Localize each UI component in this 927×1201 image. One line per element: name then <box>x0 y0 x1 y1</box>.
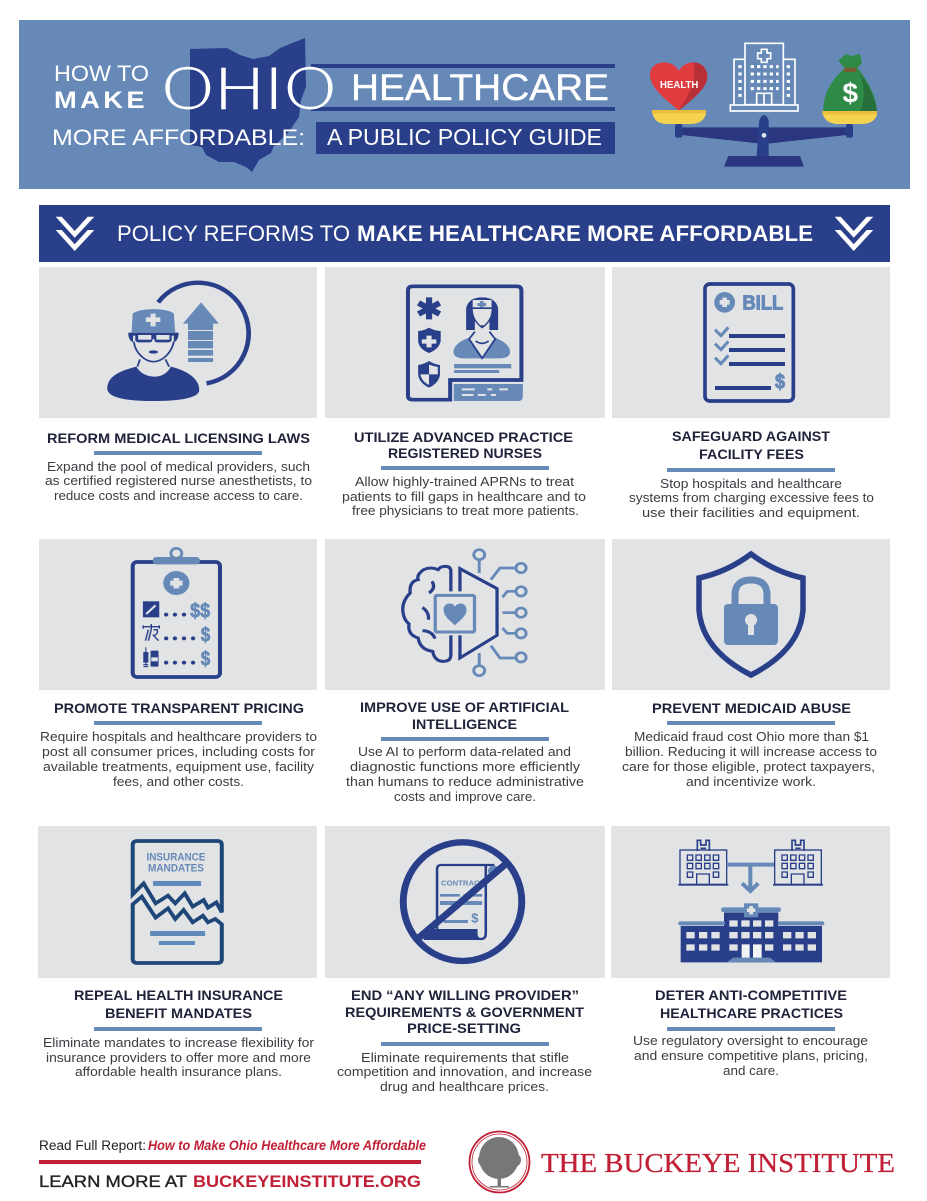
heading <box>345 987 584 1036</box>
title: MAKE <box>54 87 148 114</box>
heading <box>655 987 847 1021</box>
title: A PUBLIC POLICY GUIDE <box>327 124 602 150</box>
icon: torn insurance mandates document: MANDATES <box>148 861 204 875</box>
icon: left small hospital <box>678 840 728 886</box>
read full report line: Read Full Report: <box>39 1138 146 1153</box>
heading: IMPROVE USE OF ARTIFICIAL <box>360 699 569 715</box>
icon: torn insurance mandates document: INSURANCE <box>147 850 206 864</box>
heading <box>74 987 283 1021</box>
description: Stop hospitals and healthcare <box>660 476 842 491</box>
heading <box>360 699 569 732</box>
icon: contract with prohibition sign <box>403 842 522 961</box>
accent bar <box>381 1042 549 1046</box>
icon: contract with prohibition sign: $ <box>471 910 479 925</box>
accent bar <box>94 451 262 455</box>
heading: PREVENT MEDICAID ABUSE <box>652 700 851 716</box>
heading: FACILITY FEES <box>699 446 804 462</box>
heading: REPEAL HEALTH INSURANCE <box>74 987 283 1003</box>
description: Require hospitals and healthcare providers to <box>40 729 317 744</box>
heading: REQUIREMENTS & GOVERNMENT <box>345 1004 584 1020</box>
accent bar <box>381 466 549 470</box>
accent bar <box>667 468 835 472</box>
description: patients to fill gaps in healthcare and to <box>342 489 586 504</box>
title <box>52 54 615 154</box>
accent bar <box>667 721 835 725</box>
accent bar <box>94 721 262 725</box>
heading: DETER ANTI-COMPETITIVE <box>655 987 847 1003</box>
heading: REGISTERED NURSES <box>388 445 542 461</box>
read full report line: How to Make Ohio Healthcare More Affordable <box>148 1138 426 1153</box>
icon: provider with upward arrow <box>107 283 249 401</box>
icon: medical bill <box>705 284 793 401</box>
description: and care. <box>723 1063 779 1078</box>
icon: scale balancing health, hospital and money: $ <box>843 78 859 109</box>
heading <box>354 429 573 461</box>
description <box>346 744 584 804</box>
icon: money bag <box>823 67 877 112</box>
icon: shield with padlock <box>699 554 803 675</box>
description: reduce costs and increase access to care. <box>54 488 303 503</box>
title: HOW TO <box>54 61 149 86</box>
icon: torn insurance mandates document <box>133 841 222 963</box>
panel: safeguard against facility fees <box>612 267 890 520</box>
description: insurance providers to offer more and more <box>46 1050 311 1065</box>
description: care for those eligible, protect taxpayers, <box>622 759 875 774</box>
icon: balance beam <box>652 110 706 124</box>
footer: report link and website <box>39 1138 426 1191</box>
description <box>342 474 586 518</box>
description: fees, and other costs. <box>113 774 244 789</box>
heading text <box>117 221 813 246</box>
description: affordable health insurance plans. <box>75 1064 282 1079</box>
description: Use regulatory oversight to encourage <box>633 1033 868 1048</box>
description <box>40 729 317 789</box>
description: and ensure competitive plans, pricing, <box>634 1048 868 1063</box>
icon: scale balancing health, hospital and money: HEALTH <box>660 80 698 91</box>
description <box>622 729 877 789</box>
panel: prevent medicaid abuse <box>612 539 890 789</box>
description: as certified registered nurse anesthetists, to <box>45 473 312 488</box>
description: Allow highly-trained APRNs to treat <box>355 474 574 489</box>
accent bar <box>667 1027 835 1031</box>
icon: medical bill: BILL <box>742 292 783 315</box>
panel: promote transparent pricing <box>39 539 317 789</box>
section heading banner <box>39 205 890 262</box>
title: MORE AFFORDABLE: <box>52 125 305 150</box>
description: diagnostic functions more efficiently <box>350 759 581 774</box>
description: costs and improve care. <box>394 789 536 804</box>
panel: end any willing provider requirements <box>325 826 605 1094</box>
description: than humans to reduce administrative <box>346 774 584 789</box>
description: systems from charging excessive fees to <box>629 490 874 505</box>
icon: AI brain circuit with heart <box>403 550 526 676</box>
accent bar <box>94 1027 262 1031</box>
icon: heart <box>650 62 707 111</box>
panel: reform medical licensing laws <box>39 267 317 503</box>
icon: large hospital <box>678 903 824 962</box>
heading: INTELLIGENCE <box>412 716 517 732</box>
learn more line <box>39 1172 421 1191</box>
icon: hospital <box>730 43 798 111</box>
header banner <box>19 20 910 189</box>
icon: clipboard price list <box>133 548 220 677</box>
description: post all consumer prices, including costs for <box>42 744 316 759</box>
heading text: MAKE HEALTHCARE MORE AFFORDABLE <box>357 221 813 246</box>
heading: UTILIZE ADVANCED PRACTICE <box>354 429 573 445</box>
heading: REFORM MEDICAL LICENSING LAWS <box>47 430 310 446</box>
description: Medicaid fraud cost Ohio more than $1 <box>634 729 869 744</box>
icon: clipboard price list: $ <box>201 624 210 646</box>
icon: tree seal <box>470 1132 530 1192</box>
icon: clipboard price list: $ <box>201 648 210 670</box>
description: Eliminate mandates to increase flexibility for <box>43 1035 315 1050</box>
icon: scale balancing health, hospital and money <box>650 43 877 167</box>
description: drug and healthcare prices. <box>380 1079 549 1094</box>
arrow: merge <box>727 865 774 891</box>
heading: PRICE-SETTING <box>407 1020 521 1036</box>
description: competition and innovation, and increase <box>337 1064 592 1079</box>
description: and incentivize work. <box>686 774 816 789</box>
icon: contract with prohibition sign: CONTRACT <box>441 879 485 888</box>
description: use their facilities and equipment. <box>642 505 860 520</box>
description: free physicians to treat more patients. <box>352 503 579 518</box>
heading: END “ANY WILLING PROVIDER” <box>351 987 579 1003</box>
description <box>633 1033 868 1078</box>
description <box>337 1050 592 1094</box>
icon: clipboard price list: $$ <box>190 600 210 622</box>
wordmark: THE BUCKEYE INSTITUTE <box>541 1148 895 1178</box>
icon: right small hospital <box>773 840 823 886</box>
panel: improve use of artificial intelligence <box>325 539 605 804</box>
title: HEALTHCARE <box>351 67 609 108</box>
icon: nurse ID card <box>408 286 523 401</box>
heading: PROMOTE TRANSPARENT PRICING <box>54 700 304 716</box>
description: available treatments, equipment use, facility <box>43 759 315 774</box>
title: OHIO <box>161 54 337 124</box>
icon: hospitals merging <box>678 840 824 962</box>
description <box>629 476 874 520</box>
accent bar <box>381 737 549 741</box>
panel: utilize advanced practice registered nurses <box>325 267 605 518</box>
heading: SAFEGUARD AGAINST <box>672 428 830 444</box>
heading <box>672 428 830 462</box>
icon: left double chevron <box>56 217 94 251</box>
heading text: POLICY REFORMS TO <box>117 221 350 246</box>
panel: deter anti-competitive healthcare practices <box>611 826 890 1078</box>
learn more line: BUCKEYEINSTITUTE.ORG <box>193 1172 421 1191</box>
read full report line <box>39 1138 426 1153</box>
description <box>43 1035 315 1079</box>
description: Eliminate requirements that stifle <box>361 1050 569 1065</box>
heading: BENEFIT MANDATES <box>105 1005 252 1021</box>
description: Use AI to perform data-related and <box>358 744 571 759</box>
icon: medical bill: $ <box>775 371 785 393</box>
description: Expand the pool of medical providers, such <box>47 459 310 474</box>
panel: repeal health insurance benefit mandates <box>38 826 317 1079</box>
learn more line: LEARN MORE AT <box>39 1172 187 1191</box>
icon: right double chevron <box>835 217 873 251</box>
heading: HEALTHCARE PRACTICES <box>660 1005 843 1021</box>
map of Ohio <box>190 38 306 172</box>
description: billion. Reducing it will increase access to <box>625 744 877 759</box>
logo: The Buckeye Institute <box>470 1132 895 1192</box>
description <box>45 459 312 503</box>
